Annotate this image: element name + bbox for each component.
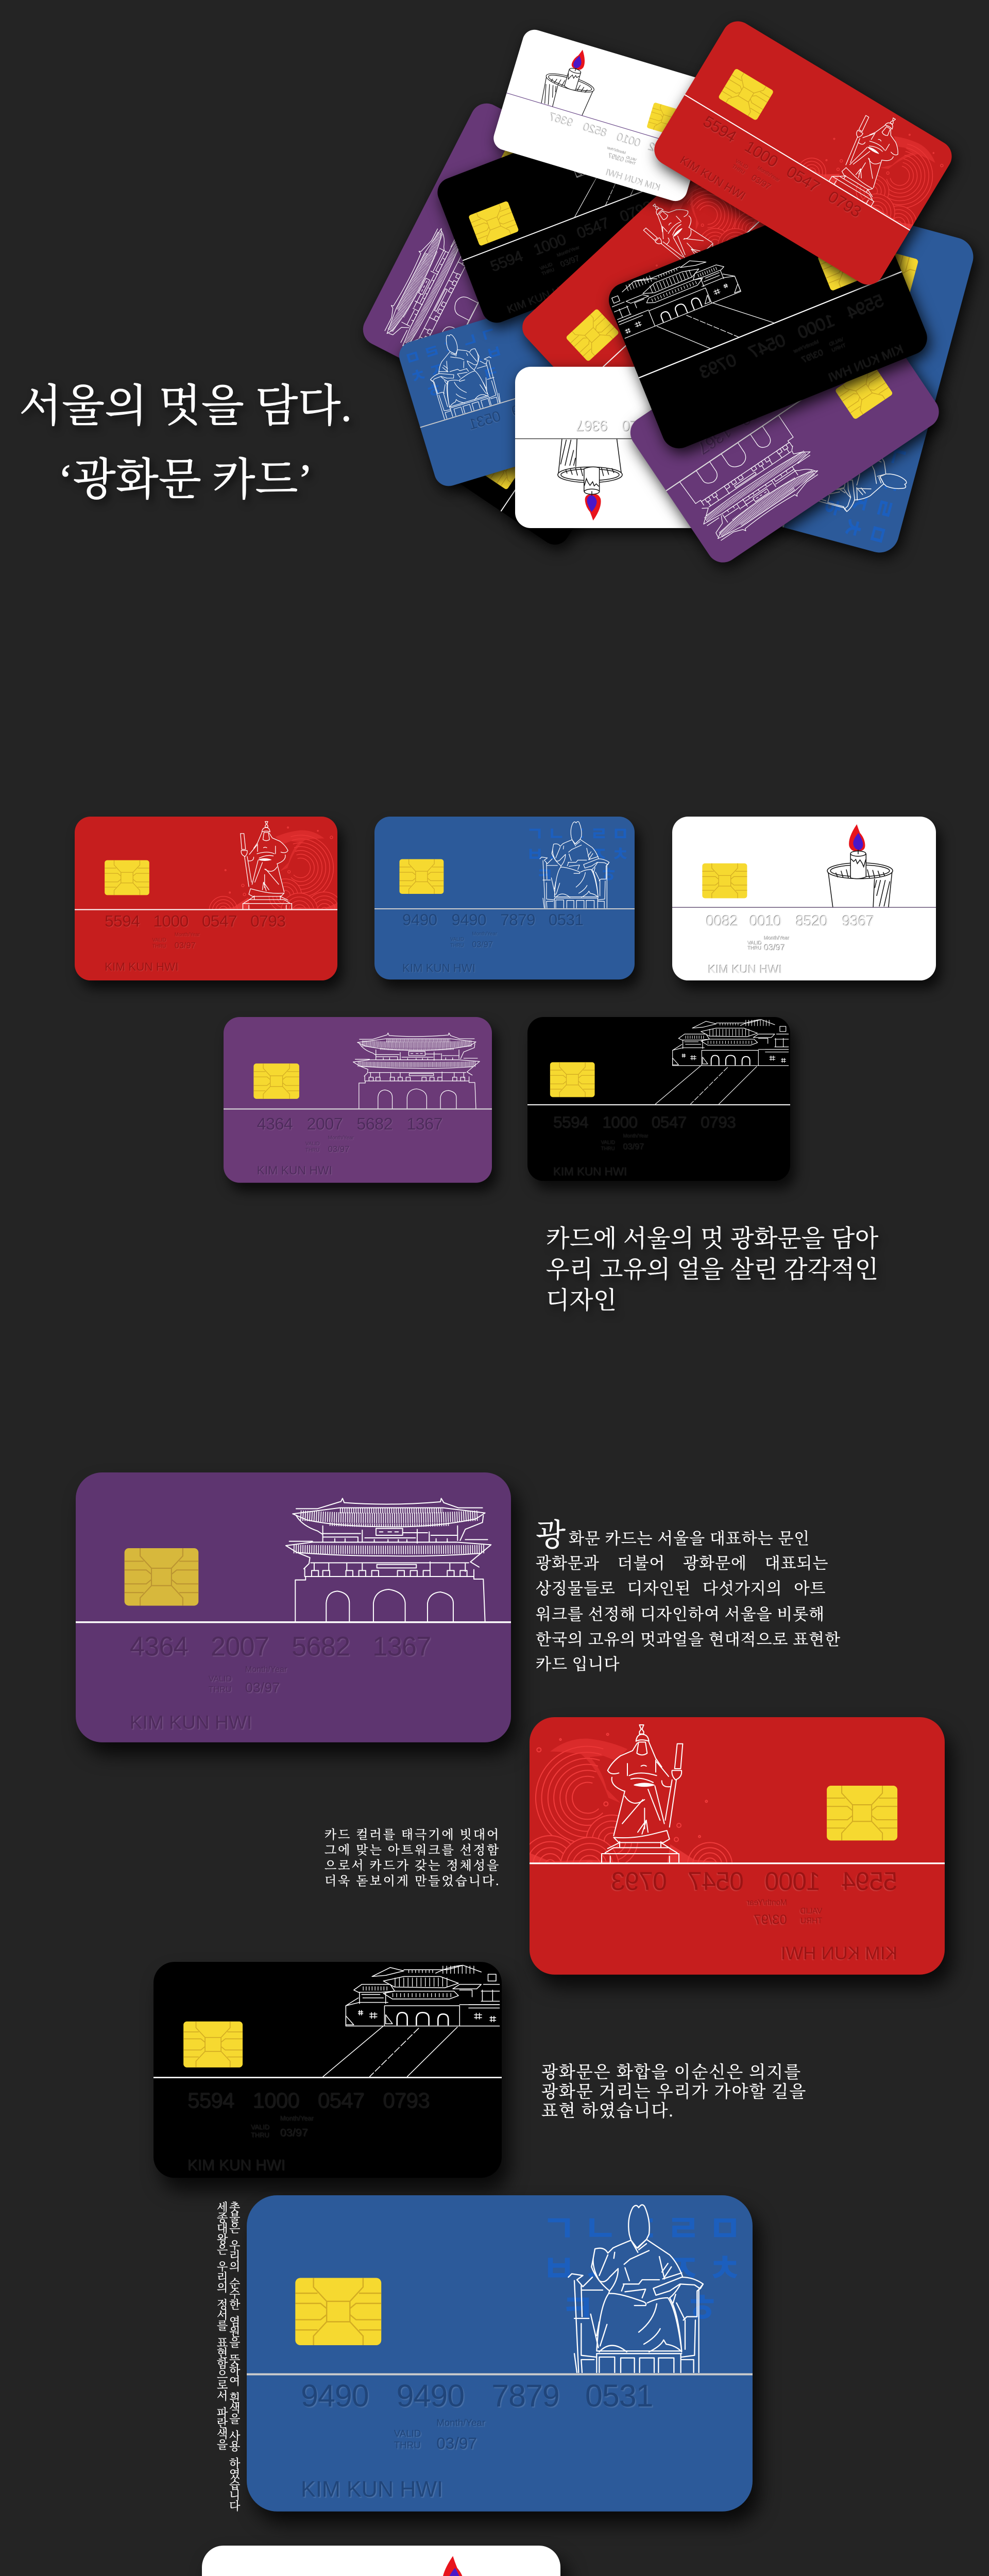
- card: purple, lower right: [624, 276, 945, 569]
- card text: 0793: [611, 1867, 667, 1895]
- text: gate and road meaning: 표현 하였습니다.: [541, 2102, 674, 2121]
- card: red, top right: [649, 15, 962, 293]
- card: white, top: 0082: [646, 140, 673, 159]
- chip: [125, 1548, 198, 1606]
- card text: 0531: [585, 2378, 653, 2413]
- card text: 1000: [602, 1112, 637, 1131]
- card: black, centre: 0547: [746, 330, 789, 362]
- card: white, top: KIM KUN HWI: [604, 167, 661, 193]
- text: card description: 상징물들로 디자인된 다섯가지의 아트: [536, 1580, 826, 1598]
- card text: Month/Year: [623, 1133, 649, 1139]
- card text: Month/Year: [245, 1665, 287, 1674]
- card text: [301, 2378, 653, 2502]
- card: purple large: [76, 1472, 511, 1742]
- card text: Month/Year: [328, 1136, 354, 1141]
- card text: THRU: [601, 1146, 615, 1151]
- card text: 5682: [356, 1115, 393, 1133]
- text: gate and road meaning: [541, 2063, 807, 2121]
- card text: [130, 1632, 431, 1733]
- card: red, top right: 0793: [825, 187, 864, 221]
- card text: VALID: [394, 2428, 421, 2438]
- card: black, centre: [604, 184, 932, 453]
- card text: 0010: [750, 913, 781, 929]
- text: card description: [536, 1518, 841, 1673]
- card: blue large: ㅋㅌㅍㅎ: [560, 2288, 726, 2330]
- card text: 4364: [257, 1115, 293, 1133]
- card text: 03/97: [328, 1144, 349, 1154]
- card: black, centre: 03/97: [800, 347, 825, 365]
- card text: KIM KUN HWI: [553, 1165, 627, 1178]
- card: white, upside down: [515, 367, 775, 528]
- text: vertical colour meaning: 촛불은 우리의 순수한 염원을 뜻하여 흰색을 사용 하였습니다: [229, 2201, 241, 2513]
- card text: KIM KUN HWI: [402, 961, 475, 974]
- card: blue small: ㅋㅌㅍㅎ: [536, 864, 621, 886]
- card: black, upper left: KIM KUN HWI: [505, 280, 574, 316]
- card text: VALID: [209, 1674, 232, 1684]
- card: purple, lower right: 2007: [778, 365, 820, 401]
- card text: 4364: [130, 1632, 188, 1662]
- text: vertical colour meaning: 세종대왕은 우리의 정서를 표현함으로서 파란색을: [217, 2201, 228, 2451]
- card text: 5594: [842, 1867, 897, 1895]
- card: red large mirrored: [521, 1717, 945, 1975]
- card text: VALID: [251, 2123, 269, 2130]
- card text: 03/97: [472, 940, 493, 949]
- card: white, top: [491, 27, 719, 204]
- card: blue, left side: 9490: [597, 369, 633, 394]
- text: card description: 워크를 선정해 디자인하여 서울을 비롯해: [536, 1605, 825, 1623]
- card text: [611, 1867, 897, 1963]
- card text: KIM KUN HWI: [301, 2477, 443, 2502]
- card text: VALID: [305, 1141, 320, 1147]
- card: blue small: ㄱㄴㄷㄹㅁ: [526, 823, 633, 845]
- card: white, upside down: 0082: [710, 417, 742, 434]
- card: white, top: 03/97: [607, 152, 624, 163]
- text: vertical colour meaning: [217, 2201, 241, 2513]
- card text: THRU: [209, 1685, 231, 1694]
- text: design summary: [546, 1226, 879, 1314]
- card: black, upper left: 03/97: [559, 254, 581, 269]
- card: white small: [672, 817, 936, 980]
- card: black, upper left: 0793: [617, 198, 654, 226]
- card text: 0531: [549, 911, 583, 929]
- chip: [827, 1786, 897, 1840]
- card: black, upper left: 0547: [574, 214, 611, 242]
- card text: 03/97: [623, 1142, 644, 1151]
- card text: 1367: [372, 1632, 431, 1662]
- card: black, centre: 1000: [795, 310, 838, 343]
- card text: 03/97: [764, 943, 786, 953]
- card text: 2007: [211, 1632, 269, 1662]
- card: blue, left side: ㄱㄴㄷㄹㅁ: [399, 324, 500, 371]
- card text: 0547: [651, 1112, 686, 1131]
- text: gate and road meaning: 광화문은 화합을 이순신은 의지를: [541, 2063, 802, 2082]
- card: blue, left side: 0531: [467, 408, 503, 433]
- card: blue, right side: ㅋㅌㅍㅎ: [815, 415, 868, 526]
- card text: THRU: [450, 943, 464, 948]
- card: black, upper left: Month/Year: [556, 244, 580, 258]
- card: black, centre: THRU: [831, 343, 847, 353]
- card text: 1367: [406, 1115, 442, 1133]
- card: blue large: ㄱㄴㄷㄹㅁ: [542, 2209, 749, 2250]
- card text: Month/Year: [175, 932, 200, 938]
- card: black, upper left: THRU: [541, 267, 555, 276]
- card text: 0793: [383, 2088, 429, 2112]
- card text: 8520: [796, 913, 828, 929]
- card: blue, left side: ㅋㅌㅍㅎ: [420, 362, 502, 404]
- card text: 9490: [397, 2378, 464, 2413]
- card: hidden black card: [434, 265, 694, 550]
- card text: Month/Year: [472, 931, 498, 937]
- card: blue, right side: [698, 191, 978, 557]
- title: ‘광화문 카드’: [58, 455, 313, 504]
- card text: VALID: [601, 1140, 615, 1145]
- card text: 03/97: [754, 1912, 787, 1927]
- chip: [253, 1063, 299, 1099]
- card text: 03/97: [245, 1680, 280, 1696]
- card: blue, left side: 7879: [510, 395, 545, 420]
- card text: [553, 1112, 736, 1178]
- card text: [706, 913, 874, 976]
- card: white, upside down: 9367: [576, 417, 607, 434]
- card: purple small: [224, 1017, 492, 1183]
- card text: 0793: [250, 911, 285, 930]
- card: white, top: Month/Year: [606, 145, 626, 155]
- text: card description: 광화문과 더불어 광화문에 대표되는: [536, 1554, 828, 1572]
- card: purple, left side: [357, 98, 627, 412]
- card text: 1000: [765, 1867, 821, 1895]
- card text: [402, 911, 583, 974]
- card: black, centre: VALID: [828, 336, 845, 347]
- text: card colours: 그에 맞는 아트워크를 선정함: [325, 1843, 500, 1857]
- card: purple, lower right: 1367: [694, 422, 735, 458]
- text: design summary: 카드에 서울의 멋 광화문을 담아: [546, 1226, 879, 1252]
- card: red, top right: THRU: [731, 163, 746, 176]
- card text: VALID: [800, 1907, 822, 1916]
- card: white, top: 9367: [547, 110, 574, 129]
- card text: 0547: [202, 911, 237, 930]
- text: gate and road meaning: 광화문 거리는 우리가 가야할 길을: [541, 2082, 807, 2102]
- card text: THRU: [305, 1148, 319, 1154]
- card: blue small: [374, 817, 635, 979]
- card text: 1000: [153, 911, 189, 930]
- card text: Month/Year: [436, 2417, 485, 2428]
- card: red small: [75, 817, 343, 980]
- card: black, centre: KIM KUN HWI: [827, 342, 906, 384]
- card: white large: [202, 2546, 560, 2576]
- card text: 03/97: [175, 941, 196, 950]
- card text: 0082: [706, 913, 738, 929]
- card: purple, lower right: 5682: [736, 394, 777, 430]
- card: red, top right: KIM KUN HWI: [678, 154, 748, 202]
- chip: [183, 2022, 243, 2067]
- card: red, top right: 03/97: [749, 173, 772, 192]
- card text: VALID: [450, 937, 464, 942]
- card: black, upper left: 1000: [531, 231, 568, 259]
- text: card colours: 더욱 돋보이게 만들었습니다.: [325, 1874, 500, 1888]
- card text: 03/97: [436, 2434, 477, 2452]
- card: white, upside down: 0010: [668, 417, 699, 434]
- card text: 2007: [307, 1115, 343, 1133]
- card: blue, left side: 9490: [553, 382, 589, 407]
- card: blue large: ㅂㅅㅇㅈㅊ: [542, 2248, 749, 2290]
- card text: 5594: [553, 1112, 588, 1131]
- card text: Month/Year: [747, 1898, 787, 1907]
- card text: 7879: [500, 911, 535, 929]
- card: blue, right side: ㄱㄴㄷㄹㅁ: [860, 417, 920, 553]
- card text: 0793: [701, 1112, 736, 1131]
- text: design summary: 우리 고유의 얼을 살린 감각적인: [546, 1257, 879, 1283]
- card text: 9490: [402, 911, 437, 929]
- card text: KIM KUN HWI: [257, 1164, 332, 1177]
- card: black, centre: Month/Year: [792, 338, 820, 354]
- card: white, upside down: 8520: [622, 417, 653, 434]
- card: black small: [527, 1017, 790, 1181]
- card text: [187, 2088, 429, 2174]
- card: white, top: 8520: [581, 121, 608, 140]
- card text: 5594: [187, 2088, 234, 2112]
- card: red, top right: VALID: [734, 158, 749, 171]
- chip: [702, 863, 747, 899]
- title: 서울의 멋을 담다.: [19, 381, 352, 431]
- card: black, centre: 5594: [844, 290, 887, 323]
- card text: 03/97: [280, 2126, 308, 2139]
- card: black, upper left: VALID: [539, 261, 553, 271]
- card text: KIM KUN HWI: [708, 963, 782, 976]
- card text: Month/Year: [764, 936, 790, 942]
- card text: 5682: [292, 1632, 350, 1662]
- card text: 0547: [688, 1867, 744, 1895]
- card: blue large: [247, 2195, 753, 2512]
- card: purple, lower right: 4364: [821, 337, 862, 373]
- card text: 9490: [301, 2378, 369, 2413]
- card text: THRU: [251, 2131, 269, 2139]
- card text: THRU: [800, 1917, 822, 1925]
- card: white, top: VALID: [625, 155, 637, 162]
- card: black, upper left: 5594: [488, 247, 525, 275]
- card: blue, left side: [396, 276, 670, 489]
- card text: 9367: [842, 913, 874, 929]
- card: blue small: ㅂㅅㅇㅈㅊ: [526, 844, 633, 866]
- hero: pile of rotated cards: [357, 15, 978, 569]
- card: white, top: 0010: [615, 130, 641, 150]
- card: red, top right: Month/Year: [756, 165, 781, 183]
- text: card description: 카드 입니다: [536, 1655, 620, 1673]
- card text: KIM KUN HWI: [781, 1943, 897, 1963]
- text: card colours: [325, 1828, 500, 1888]
- text: card description: 광: [536, 1518, 566, 1552]
- text: design summary: 디자인: [546, 1287, 617, 1314]
- card: white, top: THRU: [624, 159, 636, 166]
- card text: [257, 1115, 442, 1177]
- card text: VALID: [748, 941, 762, 946]
- title: [19, 381, 352, 504]
- card text: 9490: [451, 911, 486, 929]
- text: card colours: 카드 컬러를 태극기에 빗대어: [325, 1828, 500, 1842]
- card: red, centre: [516, 151, 811, 441]
- card: black large: [154, 1962, 502, 2178]
- chip: [105, 860, 149, 895]
- card: red, top right: 1000: [742, 137, 781, 171]
- card text: 0547: [317, 2088, 364, 2112]
- card text: Month/Year: [280, 2114, 314, 2122]
- card text: 5594: [105, 911, 140, 930]
- chip: [550, 1062, 595, 1097]
- card: red, top right: 0547: [783, 162, 823, 196]
- card: black, centre: 0793: [697, 350, 740, 382]
- card: red, top right: 5594: [700, 112, 740, 146]
- card text: 7879: [491, 2378, 559, 2413]
- card: black, upper left: [433, 95, 719, 327]
- card text: THRU: [748, 946, 762, 952]
- card text: [105, 911, 285, 973]
- text: card description: 화문 카드는 서울을 대표하는 문인: [569, 1530, 810, 1548]
- card: blue, left side: ㅂㅅㅇㅈㅊ: [404, 342, 505, 389]
- text: card colours: 으로서 카드가 갖는 정체성을: [325, 1859, 500, 1873]
- card text: VALID: [152, 938, 166, 943]
- card text: KIM KUN HWI: [105, 960, 178, 973]
- card: blue, right side: ㅂㅅㅇㅈㅊ: [835, 411, 896, 546]
- card text: KIM KUN HWI: [130, 1711, 252, 1733]
- card text: THRU: [394, 2439, 421, 2450]
- card text: KIM KUN HWI: [187, 2157, 285, 2174]
- card text: 1000: [252, 2088, 299, 2112]
- chip: [399, 859, 444, 894]
- text: card description: 한국의 고유의 멋과얼을 현대적으로 표현한: [536, 1631, 841, 1649]
- card text: THRU: [152, 943, 166, 949]
- chip: [295, 2278, 381, 2345]
